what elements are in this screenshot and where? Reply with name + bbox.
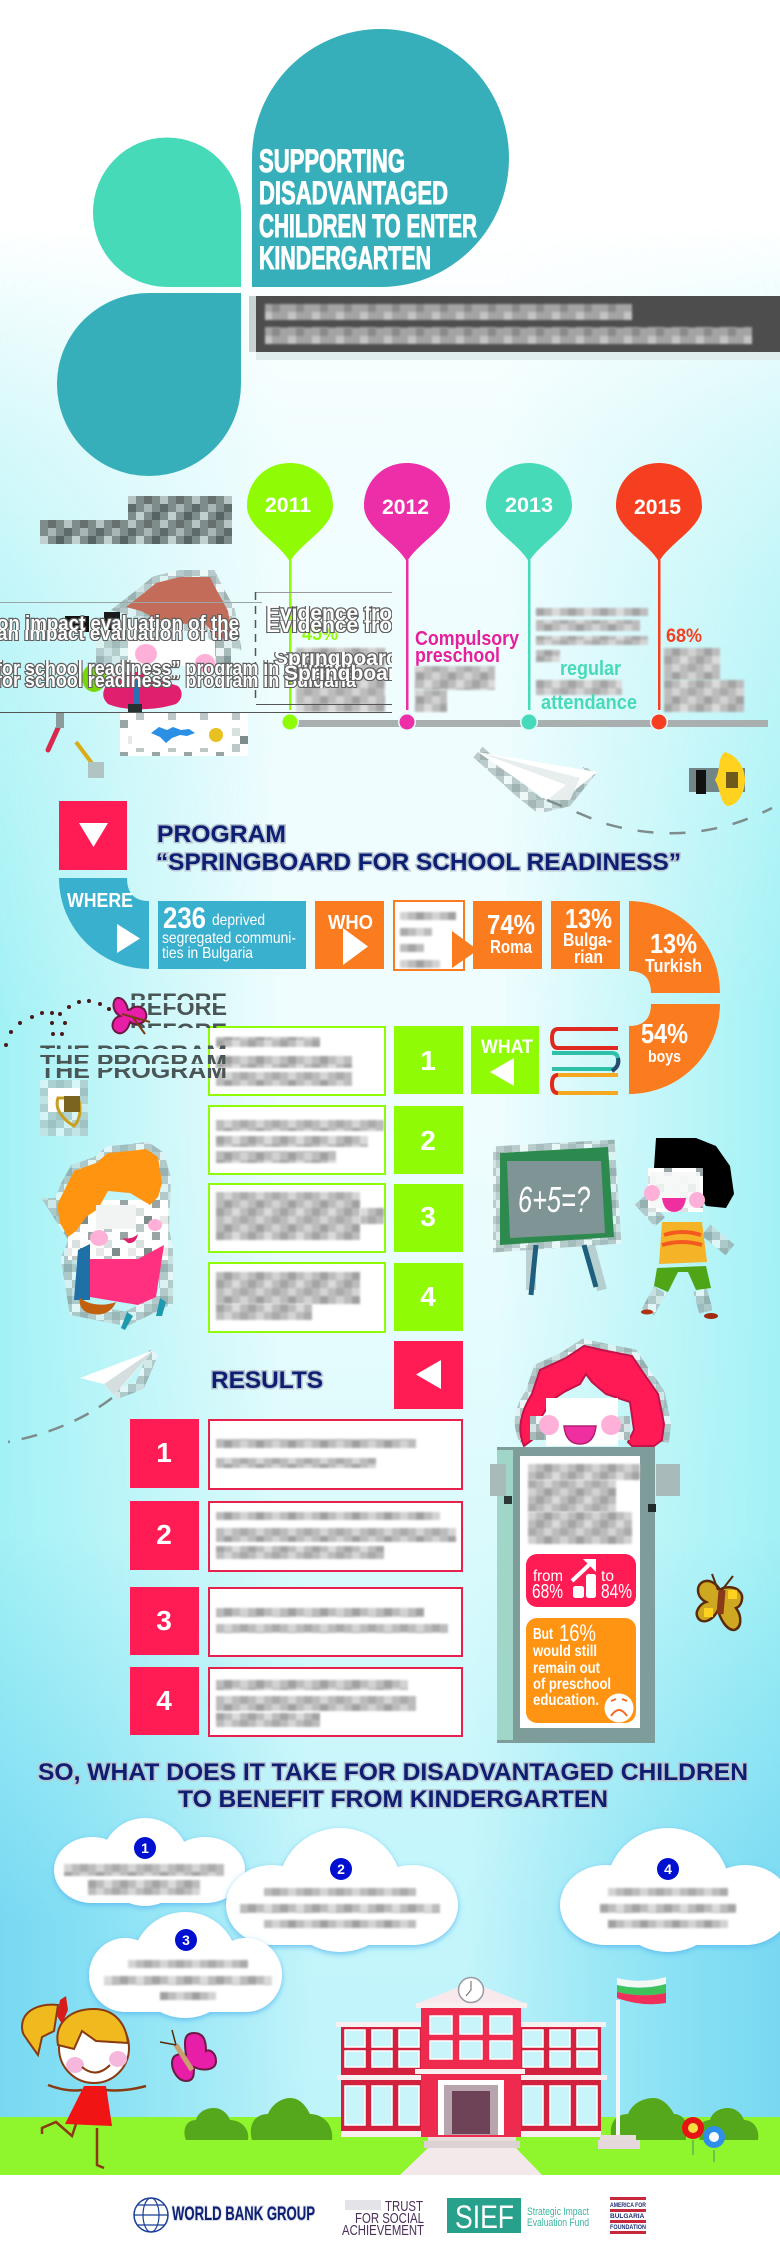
dotted trail [4, 999, 111, 1047]
what item 1: 1 [420, 1045, 436, 1076]
america for bulgaria logo: AMERICA FOR [610, 2202, 646, 2209]
cloud 2 [226, 1828, 458, 1952]
callout 16 percent: of preschool [533, 1676, 611, 1693]
13% bulgarian tile: rian [574, 947, 603, 967]
result 4 [130, 1667, 462, 1736]
world bank group logo: WORLD BANK GROUP [172, 2204, 315, 2225]
header flower and title [57, 29, 509, 476]
child drawing on floor (pixelated) [48, 577, 248, 778]
hair [126, 577, 233, 641]
trust for social achievement logo: TRUST [385, 2198, 423, 2215]
what item 2: 2 [420, 1125, 436, 1156]
door [438, 2080, 504, 2135]
who tile: WHO [328, 912, 373, 934]
results list [130, 1419, 462, 1736]
boy [640, 1138, 734, 1319]
balloon 2013: 2013 [505, 494, 553, 517]
sief logo: SIEF [455, 2199, 514, 2235]
before the program heading (glitched): THE PROGRAM [40, 1050, 227, 1075]
236 communities tile: deprived [212, 912, 265, 929]
lower teal petal [57, 293, 241, 476]
236 communities tile: segregated communi- [162, 930, 296, 947]
callout 68 to 84 [526, 1554, 636, 1607]
ground and sky scene [0, 2117, 780, 2260]
what tile: WHAT [481, 1037, 533, 1058]
before the program heading (glitched): THE PROGRAM [40, 1058, 227, 1083]
board frame [497, 1447, 655, 1743]
program title: PROGRAM [157, 821, 286, 848]
program path [59, 878, 720, 1094]
54% boys tile [629, 1004, 720, 1094]
red arrow square [59, 801, 127, 870]
2015 note: 68% [666, 626, 702, 647]
timeline axis [295, 720, 768, 727]
steps and path [400, 2137, 542, 2175]
before the program heading (glitched) [40, 994, 226, 1078]
236 communities tile: 236 [163, 902, 206, 935]
timeline [247, 463, 768, 731]
program header [59, 801, 681, 876]
glitched overlay text: for school readiness” program in Bulgaria [0, 670, 357, 692]
where tile: WHERE [67, 890, 133, 912]
236 communities tile [158, 901, 306, 969]
glitched overlay text [0, 592, 423, 713]
13% bulgarian tile [551, 901, 620, 969]
sief logo: Strategic Impact [527, 2206, 589, 2218]
2013 note: regular [560, 658, 621, 680]
green sleeve [82, 664, 106, 692]
cloud 2: 2 [337, 1861, 345, 1877]
yellow butterfly right [697, 1574, 742, 1630]
hair [57, 2009, 128, 2049]
pink shirt [103, 672, 182, 709]
board paper [520, 1456, 640, 1728]
glitched overlay text: Evidence from [266, 614, 411, 637]
glitched overlay text: Evidence from [266, 602, 411, 625]
title: KINDERGARTEN [259, 240, 431, 276]
title: CHILDREN TO ENTER [259, 208, 477, 244]
where tile [59, 878, 149, 969]
13% bulgarian tile: 13% [565, 903, 612, 934]
2013 note [536, 608, 648, 714]
mint petal [93, 138, 241, 287]
balloon 2015: 2015 [634, 496, 681, 519]
before the problem heading (pixelated) [40, 496, 232, 544]
girl with ponytail [22, 1996, 146, 2168]
what item 4: 4 [420, 1281, 436, 1312]
what item 3 [209, 1184, 463, 1252]
balloon 2012 [364, 463, 450, 731]
what item 3: 3 [420, 1201, 436, 1232]
2015 note [664, 626, 744, 712]
cloud 3: 3 [182, 1932, 190, 1948]
balloon 2013 [486, 463, 572, 731]
2013 note: attendance [541, 692, 637, 714]
pencils [48, 728, 58, 750]
what item 4 [209, 1263, 463, 1332]
before the program heading (glitched): BEFORE [130, 989, 227, 1014]
callout 16 percent: 16% [559, 1620, 596, 1647]
so, what does it take heading: TO BENEFIT FROM KINDERGARTEN [178, 1786, 608, 1813]
callout 16 percent [526, 1618, 636, 1723]
callout 16 percent: remain out [533, 1660, 601, 1677]
13% turkish tile [629, 901, 720, 993]
callout 68 to 84: to [601, 1568, 614, 1585]
icon: books [552, 1029, 618, 1093]
before the program heading (glitched): BEFORE [130, 995, 227, 1020]
13% bulgarian tile: Bulga- [563, 930, 612, 950]
2012 note: preschool [415, 645, 500, 667]
13% turkish tile: 13% [650, 928, 697, 959]
red hair [522, 1346, 664, 1442]
result 4: 4 [156, 1685, 172, 1716]
paper plane top right [478, 752, 772, 833]
paper plane left [8, 1350, 154, 1442]
who description box [394, 901, 478, 970]
result 1: 1 [156, 1437, 172, 1468]
glitched overlay text: on impact evaluation of the [0, 613, 239, 635]
result 2: 2 [156, 1519, 172, 1550]
logos [134, 2197, 646, 2239]
so, what does it take heading: SO, WHAT DOES IT TAKE FOR DISADVANTAGED CHILDREN [38, 1759, 748, 1786]
balloon 2015 [616, 463, 702, 731]
callout 68 to 84: 84% [601, 1581, 632, 1603]
ponytail [22, 2005, 58, 2055]
yellow butterfly top right [689, 752, 745, 806]
what item 2 [209, 1106, 463, 1174]
results header [211, 1341, 463, 1409]
program title [156, 821, 681, 876]
236 communities tile: ties in Bulgaria [162, 945, 253, 962]
cloud 4: 4 [664, 1861, 672, 1877]
bushes [184, 2098, 758, 2140]
trust for social achievement logo: FOR SOCIAL [355, 2210, 424, 2227]
result 1 [130, 1419, 462, 1489]
flag [598, 1977, 666, 2149]
flowers [682, 2117, 725, 2162]
before the program heading (glitched): THE PROGRAM [40, 1041, 227, 1066]
54% boys tile: boys [648, 1047, 681, 1066]
what tile [471, 1026, 539, 1094]
america for bulgaria logo: BULGARIA [610, 2213, 645, 2220]
results heading: RESULTS [211, 1367, 323, 1394]
title [259, 143, 477, 276]
result 3 [130, 1587, 462, 1656]
blackboard [500, 1147, 614, 1295]
2012 note [415, 628, 520, 712]
bulb icon (pixelated) [40, 1080, 88, 1136]
title: DISADVANTAGED [259, 175, 448, 211]
large teal petal [252, 29, 509, 287]
balloon 2011: 2011 [265, 494, 311, 517]
54% boys tile: 54% [641, 1018, 688, 1049]
cloud 1: 1 [141, 1840, 149, 1856]
balloon 2012: 2012 [382, 496, 429, 519]
so, what does it take heading [38, 1759, 748, 1813]
callout 16 percent: But [533, 1626, 554, 1643]
balloon 2011 [247, 463, 333, 731]
sief logo: Evaluation Fund [527, 2217, 589, 2229]
pink book [88, 1245, 164, 1305]
2011 note: 45% [302, 624, 338, 645]
callout 68 to 84: from [533, 1568, 563, 1585]
head [59, 2013, 129, 2083]
pink butterfly [113, 998, 150, 1034]
2011 note [296, 624, 385, 712]
windows [345, 2016, 597, 2125]
blackboard: 6+5=? [518, 1179, 590, 1220]
cloud 3 [89, 1912, 282, 2018]
blackboard and boy [500, 1138, 734, 1319]
program title: “SPRINGBOARD FOR SCHOOL READINESS” [156, 849, 681, 876]
glitched overlay text: Springboard f [274, 647, 413, 670]
trust for social achievement logo: ACHIEVEMENT [342, 2222, 424, 2239]
result 3: 3 [156, 1605, 172, 1636]
callout 68 to 84: 68% [532, 1581, 563, 1603]
cloud 1 [54, 1818, 245, 1906]
clock [458, 1978, 484, 2002]
who tile [315, 901, 384, 969]
2012 note: Compulsory [415, 628, 520, 650]
subtitle bar (pixelated text) [249, 296, 780, 360]
america for bulgaria logo [610, 2197, 646, 2234]
74% roma tile: Roma [490, 937, 533, 957]
roof [416, 1982, 527, 2004]
cloud 4 [560, 1828, 780, 1952]
glitched overlay text: Springboard f [284, 662, 423, 685]
wings [341, 2024, 601, 2137]
13% turkish tile: Turkish [645, 956, 702, 976]
arms and legs [42, 2085, 146, 2168]
74% roma tile [473, 901, 542, 969]
result 2 [130, 1501, 462, 1571]
america for bulgaria logo: FOUNDATION [610, 2224, 646, 2231]
trust for social achievement logo [342, 2198, 424, 2239]
before the program heading (glitched): BEFORE [130, 1019, 227, 1044]
school building [336, 1978, 607, 2175]
pink butterfly lower [160, 2030, 216, 2081]
world bank group logo [134, 2198, 315, 2232]
centre block [421, 2006, 521, 2137]
callout 16 percent: would still [532, 1643, 597, 1660]
dress [65, 2086, 112, 2126]
child reading (orange hair) [54, 1149, 168, 1330]
callout 16 percent: education. [533, 1692, 599, 1709]
red haired girl holding board [490, 1346, 680, 1743]
what item 1 [209, 1026, 463, 1095]
glitched overlay text: an impact evaluation of the [0, 623, 239, 645]
glitched overlay text: for school readiness” program in Bulgaria [0, 658, 357, 680]
title: SUPPORTING [259, 143, 405, 179]
what list [209, 1026, 463, 1332]
74% roma tile: 74% [487, 909, 535, 940]
sief logo [447, 2198, 589, 2235]
